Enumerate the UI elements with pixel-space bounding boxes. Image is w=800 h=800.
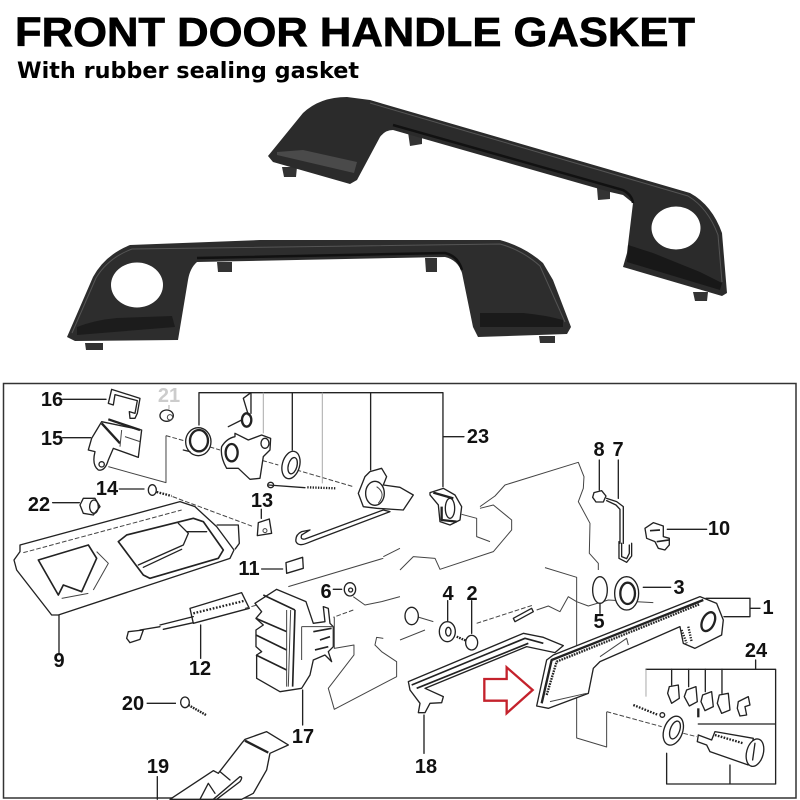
part number labels: 24 <box>745 640 768 662</box>
part 23: clamp <box>430 488 462 525</box>
part: bushing <box>183 428 211 456</box>
part 14: screw <box>119 485 172 496</box>
part: lever with spring <box>221 393 271 479</box>
part 13: clip <box>257 509 272 536</box>
part number labels: 20 <box>122 693 144 715</box>
long cable rod <box>245 548 400 608</box>
part 1: exterior door handle <box>537 597 760 708</box>
title: FRONT DOOR HANDLE GASKET <box>15 9 695 55</box>
diagram frame <box>4 384 796 798</box>
part 9: interior door pull <box>14 502 239 653</box>
part number labels: 21 <box>158 385 180 407</box>
part number labels: 16 <box>41 389 63 411</box>
part number labels: 7 <box>612 439 624 461</box>
part 12: rod with sleeve <box>127 593 249 658</box>
part number labels: 9 <box>53 650 65 672</box>
subtitle: With rubber sealing gasket <box>17 59 359 84</box>
part number labels: 19 <box>147 756 169 778</box>
part 8: nut <box>593 460 606 502</box>
part 17: lock housing <box>255 589 333 725</box>
parts 5 and 3: bushing and cap <box>593 577 671 613</box>
part 21: nut <box>160 405 173 421</box>
part number labels: 13 <box>251 490 273 512</box>
part number labels: 22 <box>28 494 50 516</box>
door cutout outline <box>328 597 400 709</box>
icon: lock cylinder hole <box>652 206 700 250</box>
part 19: window bracket <box>157 732 288 799</box>
part number labels: 10 <box>708 518 730 540</box>
part 22: grommet <box>53 498 100 515</box>
part number labels: 12 <box>189 658 211 680</box>
icon: lock cylinder hole <box>111 262 163 308</box>
part 15: lock mechanism <box>63 419 142 470</box>
door edge lines <box>400 462 607 747</box>
dashed rod and spring line <box>477 597 653 623</box>
part number labels: 2 <box>466 583 478 605</box>
part 20: screw <box>147 697 206 715</box>
dashed assembly lines <box>108 436 353 527</box>
part 10: clip <box>645 523 707 550</box>
part number labels: 6 <box>320 581 332 603</box>
part number labels: 1 <box>762 597 774 619</box>
part 16: clip <box>63 389 140 418</box>
part number labels: 5 <box>593 611 605 633</box>
part 6: nut <box>333 583 356 596</box>
part 23 bracket lines <box>199 393 464 487</box>
part number labels: 17 <box>292 726 314 748</box>
red arrow <box>484 667 533 713</box>
part number labels <box>28 385 774 778</box>
part: washer <box>279 449 303 481</box>
part number labels: 4 <box>442 583 454 605</box>
photo: upper door handle gasket <box>268 97 727 301</box>
part number labels: 14 <box>96 478 119 500</box>
part: lever plate <box>358 468 413 510</box>
part: spring and hook rod <box>268 482 390 545</box>
parts 4 and 2: washer and bolt <box>400 601 478 650</box>
part number labels: 8 <box>593 439 605 461</box>
part 11: clip <box>262 557 303 573</box>
part number labels: 11 <box>238 558 260 580</box>
part number labels: 23 <box>467 426 489 448</box>
part 18 and gasket <box>408 633 563 753</box>
part 7: hook rod <box>607 460 632 562</box>
part number labels: 18 <box>415 756 437 778</box>
part number labels: 3 <box>673 577 685 599</box>
photo: lower door handle gasket <box>67 240 571 350</box>
part 24: lock kit <box>607 660 776 784</box>
part number labels: 15 <box>41 428 63 450</box>
